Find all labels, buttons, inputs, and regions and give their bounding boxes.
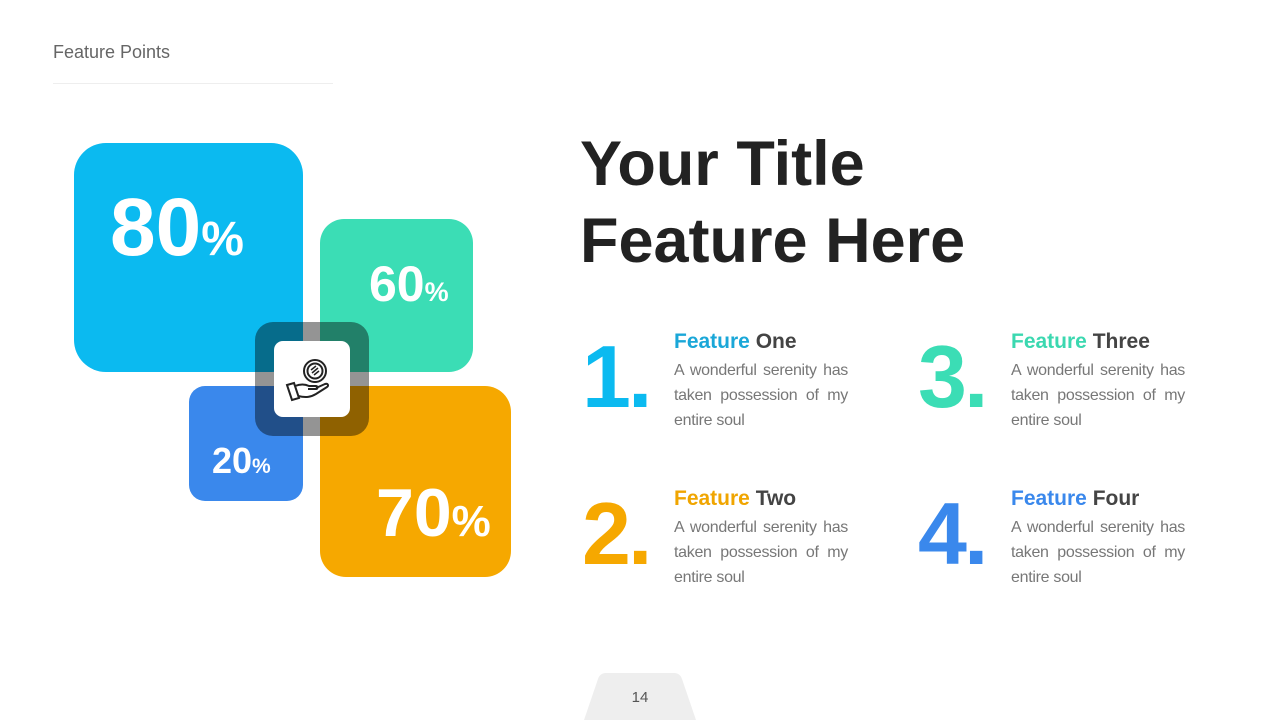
tile: 20%	[189, 386, 303, 501]
text: Feature Three	[1011, 330, 1150, 353]
tile: 60%	[320, 219, 473, 372]
feature 1: 1.	[582, 327, 649, 426]
text: A wonderful serenity has taken possession of my entire soul	[1011, 519, 1185, 586]
text: A wonderful serenity has taken possession of my entire soul	[674, 362, 848, 429]
title: Feature Here	[580, 206, 965, 276]
text: A wonderful serenity has taken possession of my entire soul	[1011, 362, 1185, 429]
page number tab	[584, 673, 696, 720]
title	[580, 129, 965, 276]
header label: Feature Points	[53, 42, 170, 62]
tile: 80%: 80%	[110, 182, 244, 273]
title: Your Title	[580, 129, 865, 199]
feature 2: 2.	[582, 484, 649, 583]
text: Feature One	[674, 330, 797, 353]
page number tab: 14	[632, 689, 648, 706]
feature 4: 4.	[918, 484, 985, 583]
tile: 60%: 60%	[369, 256, 449, 312]
tile: 70%: 70%	[376, 475, 491, 551]
text: Feature Four	[1011, 487, 1139, 510]
tile: 80%	[74, 143, 303, 372]
tile: 70%	[320, 386, 511, 577]
dark overlay	[255, 322, 369, 436]
text: A wonderful serenity has taken possession of my entire soul	[674, 519, 848, 586]
tile: 20%: 20%	[212, 440, 271, 481]
feature 3: 3.	[918, 327, 985, 426]
text: Feature Two	[674, 487, 796, 510]
icon: coin in hand	[274, 341, 350, 417]
